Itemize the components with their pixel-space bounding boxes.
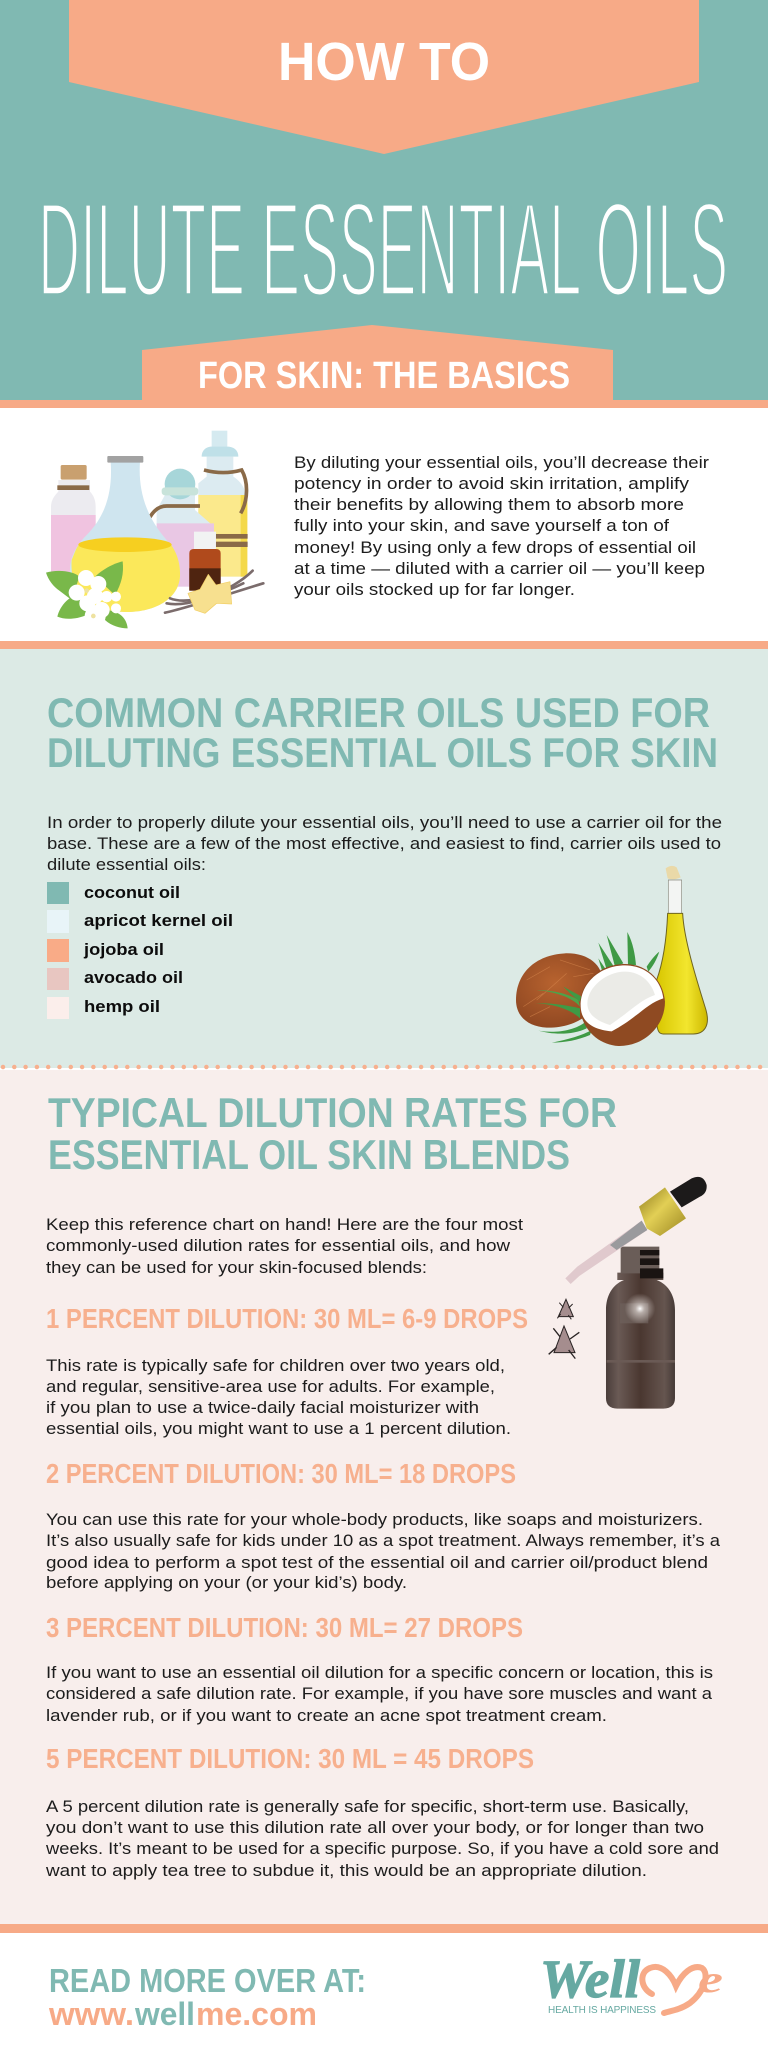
section: 2 percent dilution: good idea to perform a spot test of the essential oil and carrier oil/product blend [46,1553,708,1572]
stoppered bottle [148,469,214,587]
icon: essential oil bottles [46,431,263,628]
list item: hemp oil: hemp oil [84,997,160,1016]
amber bottle [606,1247,675,1409]
text block: intro [294,453,709,599]
list item: jojoba oil [47,939,164,962]
text block: reference chart intro [46,1215,523,1277]
small amber bottle [189,532,221,591]
logo heart stroke [642,1967,706,2013]
heading: carrier oils [47,689,718,776]
panel: common carrier oils [0,649,768,1068]
text block: intro: By diluting your essential oils, you’ll decrease their [294,453,709,472]
leaves [46,561,128,628]
white flowers [69,570,121,625]
footer website url: well [134,1996,195,2032]
small drops [549,1299,579,1359]
pink bottle [51,465,96,577]
section: 5 percent dilution: you don’t want to use this dilution rate all over your body, or for longer than two [46,1818,704,1837]
text block: intro: your oils stocked up for far longer. [294,580,575,599]
section: 5 percent dilution: weeks. It’s meant to be used for a specific purpose. So, if you have a cold sore and [45,1839,719,1858]
footer website url: me.com [196,1996,317,2032]
section: 1 percent dilution: 1 PERCENT DILUTION: 30 ML= 6-9 DROPS [46,1303,528,1334]
section: 2 percent dilution: 2 PERCENT DILUTION: 30 ML= 18 DROPS [46,1458,516,1489]
top chevron ribbon [69,0,699,154]
text block: carrier oils intro [47,813,722,874]
text block: intro: money! By using only a few drops of essential oil [294,538,696,557]
section: 3 percent dilution: considered a safe dilution rate. For example, if you have sore muscles and want a [46,1684,713,1703]
list item: avocado oil: avocado oil [84,968,183,987]
panel: footer [0,1933,768,2070]
list item: hemp oil [47,997,160,1019]
text block: reference chart intro: Keep this reference chart on hand! Here are the four most [46,1215,523,1234]
section: 1 percent dilution: and regular, sensitive-area use for adults. For example, [46,1377,495,1396]
section: 5 percent dilution [45,1743,719,1880]
panel: header banner [0,0,768,408]
section: 3 percent dilution: If you want to use an essential oil dilution for a specific concern or location, this is [46,1663,713,1682]
text block: reference chart intro: they can be used for your skin-focused blends: [46,1258,427,1277]
text block: reference chart intro: commonly-used dilution rates for essential oils, and how [46,1236,511,1255]
oil bottle [656,866,707,1034]
footer website url: www. [48,1996,134,2032]
text block: carrier oils intro: base. These are a few of the most effective, and easiest to find, carrier oils used to [47,834,721,853]
whole coconut [516,953,603,1028]
list item: coconut oil [47,882,180,904]
vanilla flower [188,574,232,613]
text block: intro: at a time — diluted with a carrier oil — you’ll keep [294,559,705,578]
section: 2 percent dilution: You can use this rate for your whole-body products, like soaps and moisturizers. [46,1510,703,1529]
text block: intro: their benefits by allowing them to absorb more [294,495,684,514]
section: 3 percent dilution: 3 PERCENT DILUTION: 30 ML= 27 DROPS [46,1612,523,1643]
section: 5 percent dilution: A 5 percent dilution rate is generally safe for specific, short-term use. Basically, [46,1797,689,1816]
panel: introduction [0,408,768,641]
panel: typical dilution rates [0,1070,768,1924]
palm leaves front [535,987,592,1043]
list item: coconut oil: coconut oil [84,883,180,902]
flask [70,456,180,612]
section: 3 percent dilution: lavender rub, or if you want to create an acne spot treatment cream. [46,1706,607,1725]
logo tagline: HEALTH IS HAPPINESS [548,2005,656,2016]
logo: WellMe: e [698,1959,723,2001]
section: 1 percent dilution: This rate is typically safe for children over two years old, [46,1356,505,1375]
subtitle text: FOR SKIN: THE BASICS [198,355,570,397]
text block: carrier oils intro: dilute essential oils: [47,855,206,874]
legend: carrier oil list [47,882,233,1019]
palm leaves back [598,932,659,973]
gold collar [639,1187,686,1236]
section: 3 percent dilution [46,1612,713,1725]
icon: coconut and oil bottle [516,866,707,1046]
text block: intro: fully into your skin, and save yourself a ton of [294,516,669,535]
coconut half [580,964,665,1046]
section: 1 percent dilution: if you plan to use a twice-daily facial moisturizer with [46,1398,479,1417]
icon: dropper bottle [549,1177,707,1409]
title: dilute essential oils: DILUTE ESSENTIAL OILS [38,175,728,324]
logo: WellMe: Well [540,1949,640,2009]
yellow bottle [198,431,248,577]
heading: carrier oils: COMMON CARRIER OILS USED FOR [47,689,710,736]
list item: apricot kernel oil: apricot kernel oil [84,911,233,930]
section: 2 percent dilution: before applying on your (or your kid’s) body. [46,1573,407,1592]
list item: apricot kernel oil [47,910,233,933]
section: 1 percent dilution [46,1303,528,1438]
section: 5 percent dilution: want to apply tea tree to subdue it, this would be an appropriate dilution. [45,1861,647,1880]
footer call to action: READ MORE OVER AT: [49,1962,366,1999]
section: 5 percent dilution: 5 PERCENT DILUTION: 30 ML = 45 DROPS [46,1743,534,1774]
rubber bulb [670,1177,707,1207]
heading: dilution rates: TYPICAL DILUTION RATES FOR [48,1089,617,1136]
heading: dilution rates [48,1089,617,1178]
text block: intro: potency in order to avoid skin irritation, amplify [294,474,690,493]
heading: how to: HOW TO [278,32,490,92]
section: 1 percent dilution: essential oils, you might want to use a 1 percent dilution. [46,1419,511,1438]
text block: carrier oils intro: In order to properly dilute your essential oils, you’ll need to use a carrier oil for the [47,813,722,832]
section: 2 percent dilution [46,1458,721,1592]
logo: WellMe [540,1949,723,2016]
heading: dilution rates: ESSENTIAL OIL SKIN BLENDS [48,1131,570,1178]
vanilla pods [165,571,263,613]
section: 2 percent dilution: It’s also usually safe for kids under 10 as a spot treatment. Always remember, it’s a [46,1531,721,1550]
list item: avocado oil [47,968,183,990]
list item: jojoba oil: jojoba oil [83,940,164,959]
divider dots [3,1065,768,1069]
subtitle ribbon [142,325,613,402]
footer website url [48,1996,317,2032]
dropper glass tube [565,1221,647,1284]
